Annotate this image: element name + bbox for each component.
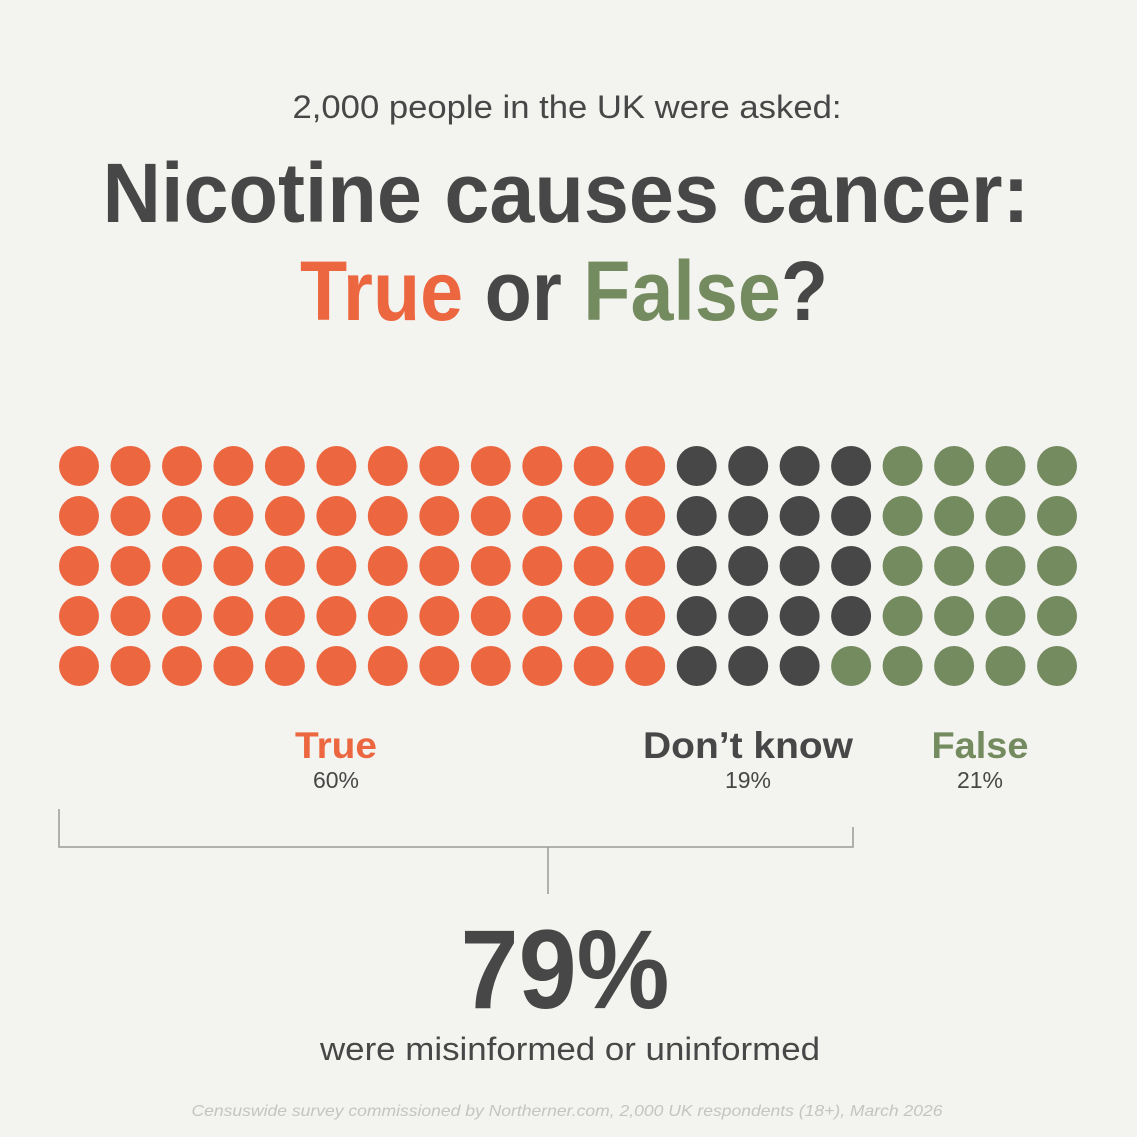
subtitle: 2,000 people in the UK were asked: <box>292 89 842 125</box>
label: false: 21% <box>957 767 1003 793</box>
title: True or False? <box>300 244 828 338</box>
label: false: False <box>932 725 1028 766</box>
bracket <box>59 809 853 894</box>
dark dots: don't know <box>677 446 871 686</box>
dot chart <box>59 446 1077 686</box>
label: false <box>932 725 1028 793</box>
label: don't know: Don’t know <box>643 725 853 766</box>
label: true <box>295 725 377 793</box>
big stat: 79% <box>460 907 670 1032</box>
label: true: True <box>295 725 377 766</box>
title: Nicotine causes cancer: <box>102 146 1030 240</box>
label: don't know <box>643 725 853 793</box>
green dots: false <box>831 446 1077 686</box>
title <box>102 146 1030 338</box>
footer source: Censuswide survey commissioned by Northerner.com, 2,000 UK respondents (18+), March 2026 <box>192 1103 943 1120</box>
label: true: 60% <box>313 767 359 793</box>
label: don't know: 19% <box>725 767 771 793</box>
stat caption: were misinformed or uninformed <box>319 1031 820 1067</box>
orange dots: true <box>59 446 665 686</box>
